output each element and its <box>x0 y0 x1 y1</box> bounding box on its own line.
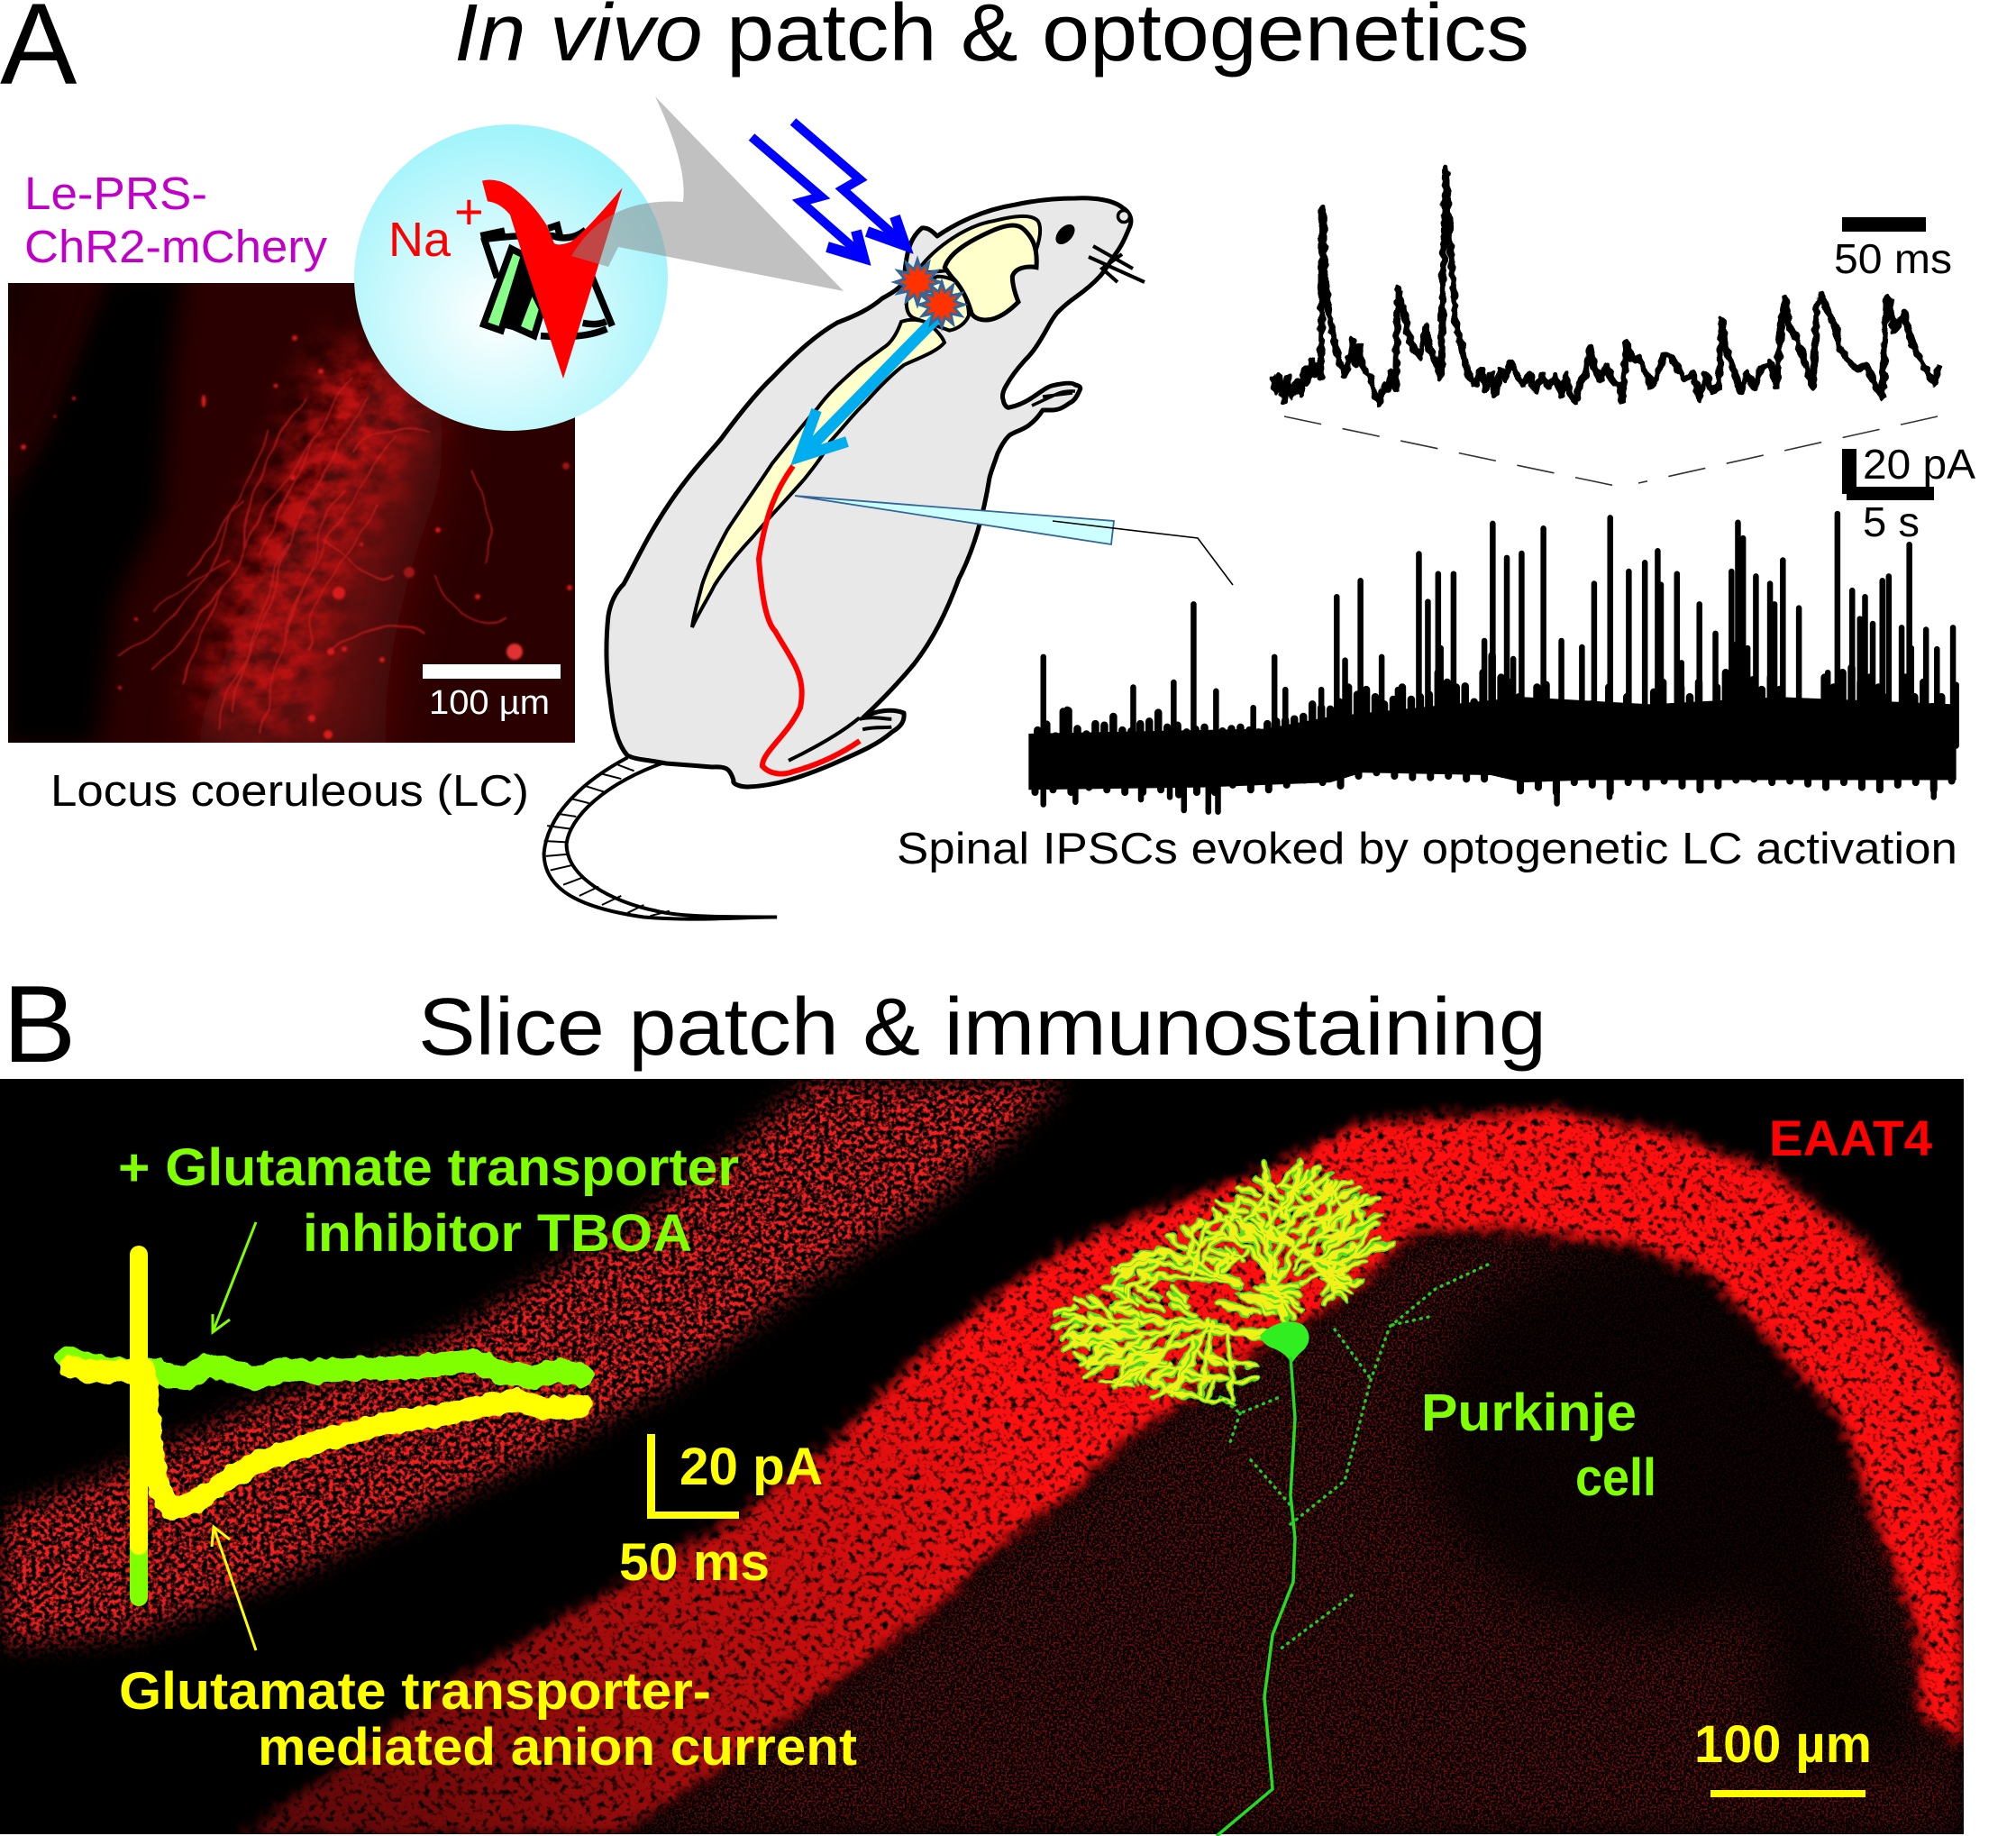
label: Le-PRS-ChR2-mChery: ChR2-mChery <box>24 221 328 272</box>
fore paw details <box>1032 391 1075 406</box>
scale bar: 20 pA and 50 ms: 20 pA <box>680 1438 823 1496</box>
eye <box>1052 221 1079 248</box>
icon: activated LC neurons <box>895 260 964 327</box>
zoom guide dashed lines <box>1284 416 1938 487</box>
chart: expanded IPSC trace <box>1273 169 1940 404</box>
panel letter B: B <box>3 963 76 1085</box>
label: TBOA inhibitor: inhibitor TBOA <box>303 1204 692 1263</box>
icon: light stimulation bolts <box>752 122 905 258</box>
scale bar: 20 pA and 50 ms <box>619 1434 823 1592</box>
whiskers <box>1089 246 1145 282</box>
icon: cell with channelrhodopsin channel: + <box>454 183 484 240</box>
red sensory pathway <box>759 466 860 773</box>
image: locus coeruleus fluorescence <box>0 270 575 757</box>
title: slice patch and immunostaining: Slice patch & immunostaining <box>418 982 1546 1073</box>
tail <box>544 757 777 919</box>
axon <box>1217 1356 1295 1836</box>
image: cerebellar slice EAAT4 staining <box>0 1079 1964 1836</box>
label: Na+: Na <box>388 213 452 267</box>
scale bar: LC image 100 um <box>423 664 561 722</box>
brain <box>907 216 1040 331</box>
label: Purkinje cell <box>1421 1384 1656 1507</box>
hind foot details <box>789 717 891 761</box>
scale bar: 20 pA and 5 s: 20 pA <box>1863 441 1975 488</box>
label: TBOA inhibitor <box>118 1138 739 1263</box>
TBOA stimulus artifact <box>130 1532 148 1597</box>
channel pore <box>480 225 612 337</box>
scale bar: 20 pA and 5 s <box>1842 441 1975 545</box>
nose <box>1117 211 1130 222</box>
label: Purkinje cell: Purkinje <box>1421 1384 1637 1442</box>
arrow: to anion current <box>212 1527 256 1650</box>
caption: locus coeruleous: Locus coeruleous (LC) <box>50 767 529 816</box>
spinal cord <box>692 320 944 627</box>
main molecular arc <box>238 1110 1964 1836</box>
body outline <box>607 198 1131 787</box>
caption: spinal IPSCs: Spinal IPSCs evoked by optogenetic LC activation <box>897 825 1957 873</box>
chart: spinal IPSC long trace <box>1028 514 1957 812</box>
scale bar: 50 ms: 50 ms <box>1834 235 1952 282</box>
control stimulus artifact <box>130 1255 148 1546</box>
label: Le-PRS-ChR2-mChery <box>24 168 328 272</box>
label: anion current: Glutamate transporter- <box>119 1662 711 1721</box>
control trace <box>70 1366 582 1510</box>
Purkinje cell <box>1032 1148 1488 1836</box>
upper molecular band <box>0 1082 1063 1645</box>
dark inner zone <box>1424 1239 1938 1767</box>
scale bar: 20 pA and 5 s: 5 s <box>1863 498 1920 545</box>
chart: current traces <box>67 1255 582 1597</box>
scale bar: slice 100 um: 100 µm <box>1694 1715 1872 1774</box>
dendritic tree <box>1032 1148 1408 1426</box>
label: anion current <box>119 1662 857 1777</box>
callout arrow: zoom from brain to channel <box>571 96 844 291</box>
TBOA trace <box>67 1358 581 1379</box>
scale bar: 50 ms <box>1834 217 1952 282</box>
scale bar: 20 pA and 50 ms: 50 ms <box>619 1533 770 1592</box>
arrow: descending LC projection <box>799 317 937 457</box>
label: TBOA inhibitor: + Glutamate transporter <box>118 1138 739 1197</box>
arrow: to TBOA trace <box>213 1222 256 1332</box>
icon: cell with channelrhodopsin channel <box>354 124 668 431</box>
ion flux arrow <box>482 180 623 379</box>
label: anion current: mediated anion current <box>258 1718 857 1777</box>
soma <box>1260 1321 1309 1363</box>
scale bar: LC image 100 um: 100 µm <box>429 684 550 722</box>
label: Le-PRS-ChR2-mChery: Le-PRS- <box>24 168 207 219</box>
patch pipette <box>795 496 1233 585</box>
axon collaterals <box>1220 1265 1488 1649</box>
mouse drawing <box>544 198 1145 919</box>
label: EAAT4: EAAT4 <box>1769 1110 1932 1166</box>
channel subunits <box>484 249 543 336</box>
label: Purkinje cell: cell <box>1575 1448 1656 1507</box>
granular layer speckle <box>612 1230 1964 1836</box>
